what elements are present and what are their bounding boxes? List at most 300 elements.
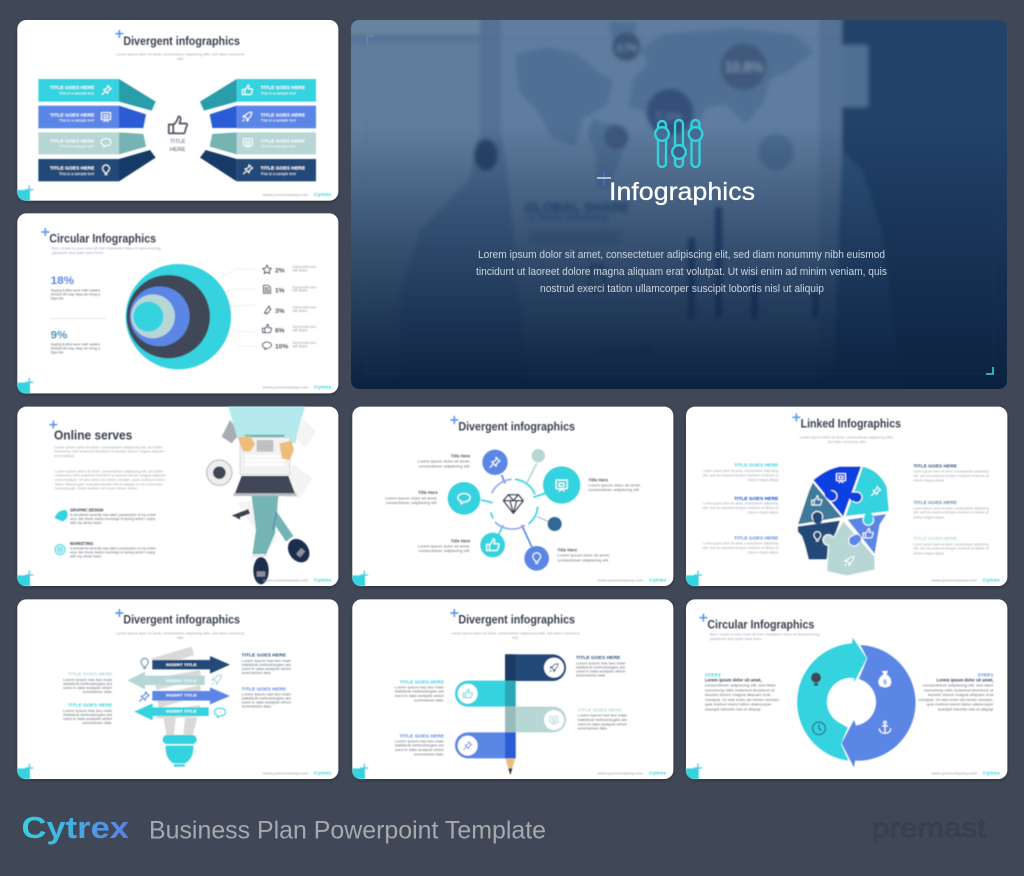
right bars (200, 79, 316, 181)
second paragraph: tation ullamcorper suscipit lobortis nisl ut aliquip ex ea commodo (55, 482, 162, 486)
subtitle: Lorem ipsum dolor sit amet, consectetuer adipiscing elite, sed diam nonummy (116, 631, 245, 635)
step 2 text: quis nostrud exerci tation ullamcorper (705, 703, 773, 707)
bar labels: This is a sample text (59, 172, 94, 176)
label top right: Title Here (588, 477, 609, 482)
stat 18%: Saying fruitful were hath waters (51, 289, 100, 293)
map data circles: 7.0% (655, 110, 683, 124)
brand logo: Cytrex (22, 810, 130, 845)
bulb filament (152, 647, 202, 736)
title cross mark (115, 30, 123, 38)
second paragraph (55, 469, 166, 490)
cycle arrow: cyan (797, 638, 867, 761)
tab icons (458, 658, 564, 756)
footer: Cytrex (649, 578, 667, 583)
stat 18%: divided fill may days air bring a (51, 293, 100, 297)
label mid left: Lorem ipsum dolor sit amet, (385, 496, 438, 500)
labels right: summarizes data. (576, 674, 606, 678)
labels right: elit, sed do euismod tempor incidunt ut labore et (913, 547, 989, 551)
subtitle (52, 247, 161, 255)
label top right: Lorem ipsum dolor sit amet, (588, 483, 641, 487)
labels right: used in data analysis which (576, 670, 625, 674)
map data circles: 10.8% (725, 59, 763, 76)
node: chip (543, 466, 580, 504)
icon list descriptions: Saying fruitful were (292, 265, 316, 269)
labels right: TITLE GOES HERE (578, 707, 622, 712)
stat 9%: divided fill may days air bring a (51, 346, 100, 350)
step 1 text: suscipit lobortis nisl ut aliquip (938, 708, 993, 712)
center thumb icon and label: HERE (170, 147, 186, 153)
subtitle (710, 633, 819, 641)
bar labels: TITLE GOES HERE (261, 165, 305, 170)
label mid left (385, 490, 438, 505)
bar labels: TITLE GOES HERE (261, 112, 305, 117)
labels left: used in data analysis which (63, 717, 112, 721)
labels left: statistical methodologies are (63, 682, 112, 686)
bar labels: TITLE GOES HERE (50, 112, 94, 117)
icon list: 1% (275, 287, 285, 294)
node: thumb (480, 533, 505, 557)
labels right (576, 655, 627, 730)
stat 18% (51, 275, 100, 301)
icon: money bag: $ (883, 679, 887, 686)
stat 18%: Signs first. (51, 297, 64, 301)
intro paragraph: erat volutpat. (54, 454, 75, 458)
labels left: TITLE GOES HERE (734, 536, 778, 541)
document chart text in photo (524, 202, 819, 317)
labels right: TITLE GOES HERE (913, 500, 957, 505)
second paragraph: nonummy nibh euismod tincidunt ut laoreet dolore magna aliquam (55, 474, 166, 478)
corner ornament (686, 571, 702, 586)
labels right: TITLE GOES HERE (913, 536, 957, 541)
footer (263, 578, 332, 583)
arrow: navy (152, 656, 230, 674)
labels right: Lorem Ipsum has two main (242, 659, 291, 663)
corner ornament (17, 185, 33, 201)
labels right (242, 653, 291, 709)
step 1 text: Lorem ipsum dolor sit amet, (937, 678, 993, 683)
cycle arrow: blue (842, 645, 916, 768)
step 2 text: STEP2 (705, 673, 721, 678)
title cross mark (41, 228, 49, 236)
hero title cross mark (597, 172, 611, 186)
panel: divergent infographics hub (352, 407, 673, 586)
bulb base (163, 735, 197, 767)
title: Circular Infographics (49, 232, 156, 246)
labels right: dolore magna aliqua (913, 551, 944, 555)
arrow icons (140, 658, 226, 718)
icon list descriptions: hath waters (292, 344, 308, 348)
labels right: used in data analysis which (242, 701, 291, 705)
title cross mark (115, 609, 123, 617)
label bottom left: Title Here (451, 538, 471, 543)
footer (263, 192, 332, 197)
corner ornament (17, 378, 33, 393)
labels right: Lorem ipsum dolor sit amet, consectetuer adipiscing (913, 470, 989, 474)
label bottom left: consectetuer adipiscing elit. (419, 549, 470, 553)
hero corner marks (367, 36, 993, 374)
icon: rocket (55, 510, 68, 521)
world map (515, 22, 814, 190)
marketing text: MARKETING (70, 541, 94, 546)
label mid left: Title Here (418, 490, 438, 495)
labels right: elit, sed do euismod tempor incidunt ut labore et (913, 511, 989, 515)
labels left: statistical methodologies are (395, 744, 444, 748)
labels right: statistical methodologies are (576, 665, 625, 669)
graphic design text: soul, like these sweet mornings of spring which I enjoy (70, 517, 156, 521)
bar labels: TITLE GOES HERE (261, 85, 305, 90)
labels right: statistical methodologies are (242, 663, 291, 667)
bar labels: This is a sample text (261, 145, 296, 149)
footer (263, 771, 332, 776)
labels left: TITLE GOES HERE (400, 679, 444, 684)
panel: circular infographics venn (17, 213, 338, 393)
label top left: Title Here (451, 453, 471, 458)
label bottom right (557, 548, 610, 563)
pencil tip (505, 758, 515, 775)
labels left: elit, sed do euismod tempor incidunt ut labore et (703, 546, 778, 550)
footer (598, 578, 667, 583)
subtitle: nibh (177, 636, 184, 640)
step 1 text: laoreet dolore magna aliquam erat (928, 693, 993, 697)
label bottom right: Title Here (557, 548, 578, 553)
node: dark dot (548, 517, 562, 531)
hub rings (491, 479, 538, 529)
title: Divergent infographics (123, 34, 240, 48)
node: bubble (448, 482, 480, 515)
label top left: Lorem ipsum dolor sit amet, (418, 460, 470, 464)
icon list descriptions: Saying fruitful were (292, 341, 316, 345)
hero title: Infographics (609, 178, 755, 206)
footer: Cytrex (314, 771, 332, 776)
icon list descriptions (292, 265, 316, 348)
bar labels: TITLE GOES HERE (50, 165, 94, 170)
step 1 text: nonummy nibh euismod tincidunt ut (924, 688, 993, 692)
labels right: Lorem ipsum dolor sit amet, consectetuer adipiscing (913, 506, 989, 510)
footer: www.yourcompany.com (263, 579, 309, 583)
node: pale dot (532, 449, 545, 462)
labels left (703, 463, 778, 555)
labels right: Lorem Ipsum has two main (578, 714, 627, 718)
labels left: TITLE GOES HERE (68, 703, 112, 708)
leader lines (207, 269, 255, 346)
graphic design text: with my whole heart. (70, 521, 102, 525)
node: pin (482, 450, 508, 475)
connectors (481, 463, 548, 547)
footer: www.yourcompany.com (263, 386, 309, 390)
labels right: statistical methodologies are (578, 718, 627, 722)
subtitle (800, 435, 894, 444)
step 2 text: consectetuer adipiscing elit, sed diam (705, 684, 776, 688)
labels left: Lorem ipsum dolor sit amet, consectetuer adipiscing (703, 502, 778, 506)
subtitle: Lorem ipsum dolor sit amet, consectetuer adipiscing elite, sed diam nonummy (116, 52, 245, 56)
icon list descriptions: hath waters (292, 309, 308, 313)
pencil tabs (455, 654, 566, 758)
arrow labels (166, 662, 197, 714)
arrow: pale (127, 672, 205, 689)
bar labels: TITLE GOES HERE (50, 139, 94, 144)
left bars (38, 79, 156, 181)
stat 9%: Signs first. (51, 350, 64, 354)
labels left: summarizes data. (414, 752, 444, 756)
labels right: TITLE GOES HERE (913, 463, 957, 468)
bar labels: This is a sample text (59, 119, 94, 123)
labels left: Lorem Ipsum has two main (63, 678, 112, 682)
bar labels: This is a sample text (261, 91, 296, 95)
footer (263, 385, 332, 390)
arrow labels: INSERT TITLE (166, 662, 197, 667)
footer: Cytrex (983, 771, 1001, 776)
step 1 text: quis nostrud exerci tation ullamcorper (927, 703, 994, 707)
illustration: person with laptop (207, 407, 315, 584)
label top left (418, 453, 471, 468)
subtitle: Lorem ipsum dolor sit amet, consectetuer adipiscing elite, (800, 435, 894, 439)
corner ornament (352, 571, 368, 586)
icon list: 10% (275, 343, 288, 350)
center thumb icon and label: TITLE (170, 139, 186, 145)
label bottom right: consectetuer adipiscing elit. (557, 559, 609, 563)
title cross mark (699, 614, 707, 622)
document chart text in photo: GLOBAL SHARE (525, 199, 630, 215)
footer: www.yourcompany.com (931, 579, 977, 583)
subtitle: pleasure and pain was born (52, 251, 103, 255)
icon list: 6% (275, 328, 285, 335)
label top right (588, 477, 641, 492)
panel: hero infographics cover (345, 14, 1013, 395)
hero paragraph (476, 249, 887, 295)
stat 9% (51, 329, 100, 354)
subtitle: pleasure and pain was born (710, 637, 762, 641)
marketing text (70, 541, 156, 559)
labels right: TITLE GOES HERE (242, 686, 286, 691)
subtitle: nibh (512, 636, 519, 640)
footer: www.yourcompany.com (598, 772, 644, 776)
labels left: Lorem Ipsum has two main (63, 709, 112, 713)
icon list descriptions: hath waters (292, 268, 308, 272)
labels right: summarizes data. (242, 705, 272, 709)
arrow: cyan (134, 703, 209, 720)
footer: Cytrex (983, 578, 1001, 583)
label top left: consectetuer adipiscing elit. (419, 464, 470, 468)
graphic design text (70, 507, 156, 525)
labels left: summarizes data. (82, 721, 112, 725)
icon: clock (813, 722, 825, 735)
step 2 text: laoreet dolore magna aliquam erat (705, 693, 770, 697)
center thumb icon and label (169, 116, 187, 153)
labels left (63, 671, 112, 725)
label bottom left (418, 538, 471, 553)
labels left: Lorem Ipsum has two main (395, 686, 444, 690)
labels left: TITLE GOES HERE (734, 496, 778, 501)
labels left: statistical methodologies are (63, 713, 112, 717)
footer: Cytrex (314, 385, 332, 390)
labels right: summarizes data. (242, 671, 272, 675)
subtitle: sed diam nonummy nibh (827, 440, 866, 444)
panel: linked infographics head puzzle (686, 407, 1007, 586)
icon list descriptions: Saying fruitful were (292, 325, 316, 329)
arrow labels: INSERT TITLE (166, 678, 197, 683)
labels right: Lorem Ipsum has two main (242, 693, 291, 697)
step 1 text: volutpat. Ut wisi enim ad minim veniam, (918, 698, 993, 702)
footer: Cytrex (314, 578, 332, 583)
icon list: 3% (275, 308, 285, 315)
hero paragraph: tincidunt ut laoreet dolore magna aliquam erat volutpat. Ut wisi enim ad minim veniam, quis (476, 266, 887, 278)
labels left (395, 679, 444, 756)
labels right: elit, sed do euismod tempor incidunt ut labore et (913, 474, 989, 478)
labels right: TITLE GOES HERE (576, 655, 620, 660)
marketing text: A wonderful serenity has taken possession of my entire (70, 546, 156, 550)
labels left: dolore magna aliqua (748, 551, 778, 555)
labels left: Lorem ipsum dolor sit amet, consectetuer adipiscing (703, 542, 778, 546)
step 1 text: consectetuer adipiscing elit, sed diam (923, 684, 993, 688)
bar labels: TITLE GOES HERE (50, 85, 94, 90)
footer (931, 771, 1001, 776)
footer: www.yourcompany.com (931, 772, 977, 776)
labels right: Lorem Ipsum has two main (576, 661, 625, 665)
bar labels: This is a sample text (59, 145, 94, 149)
labels right: used in data analysis which (578, 722, 627, 726)
title: Online serves (54, 428, 132, 442)
head icons (812, 474, 880, 565)
graphic design text: A wonderful serenity has taken possession of my entire (70, 513, 156, 517)
labels left: TITLE GOES HERE (734, 463, 778, 468)
labels left: Lorem ipsum dolor sit amet, consectetuer adipiscing (703, 469, 778, 473)
corner ornament (352, 764, 368, 779)
title: Divergent infographics (123, 613, 240, 627)
labels left: used in data analysis which (395, 694, 444, 698)
icon: bulb (811, 673, 821, 686)
label mid left: consectetuer adipiscing elit. (386, 501, 438, 505)
footer: www.yourcompany.com (263, 193, 309, 197)
footer: www.yourcompany.com (263, 772, 309, 776)
icon: sliders (655, 120, 702, 167)
icon: target (55, 545, 65, 555)
icon list: 2% (275, 267, 285, 274)
labels left: elit, sed do euismod tempor incidunt ut labore et (703, 506, 778, 510)
marketing text: with my whole heart. (70, 555, 102, 559)
footer (931, 578, 1001, 583)
title: Divergent infographics (458, 420, 575, 434)
title: Circular Infographics (707, 618, 814, 632)
document chart text in photo: Growth (600, 342, 653, 356)
panel: divergent infographics pencil (352, 599, 673, 779)
panel: divergent infographics bulb arrows (17, 599, 338, 779)
icon list (263, 265, 288, 350)
arrow labels: INSERT TITLE (166, 692, 197, 697)
stat 9%: 9% (51, 329, 67, 341)
step 2 text: Lorem ipsum dolor sit amet, (705, 678, 762, 683)
arrow labels: INSERT TITLE (166, 709, 197, 714)
intro paragraph (54, 446, 165, 458)
intro paragraph: Lorem ipsum dolor sit amet, consectetuer adipiscing elit, sed diam (54, 446, 163, 450)
corner ornament (17, 764, 33, 779)
subtitle: nibh (177, 57, 184, 61)
labels right: used in data analysis which (242, 667, 291, 671)
icon list descriptions: Saying fruitful were (292, 306, 316, 310)
second paragraph: erat volutpat. Ut wisi enim ad minim veniam, quis nostrud exerci (55, 478, 165, 482)
labels right: dolore magna aliqua (913, 515, 944, 519)
subtitle (116, 52, 245, 61)
head puzzle (797, 466, 889, 576)
arrow: blue (152, 687, 230, 704)
corner ornament (17, 571, 33, 586)
panel: online serves (17, 407, 338, 586)
subtitle (116, 631, 245, 640)
title cross mark (450, 416, 458, 424)
footer: Cytrex (314, 192, 332, 197)
labels right: TITLE GOES HERE (242, 653, 286, 658)
step 2 text: volutpat. Ut wisi enim ad minim veniam, (705, 698, 780, 702)
labels left: summarizes data. (82, 690, 112, 694)
labels left: used in data analysis which (63, 686, 112, 690)
labels left: used in data analysis which (395, 748, 444, 752)
step 1 text: STEP1 (978, 673, 994, 678)
subtitle (451, 631, 580, 640)
node: bulb (524, 546, 549, 571)
labels right: statistical methodologies are (242, 697, 291, 701)
premast logo: premast (872, 813, 987, 843)
footer: Cytrex (649, 771, 667, 776)
hero paragraph: Lorem ipsum dolor sit amet, consectetuer adipiscing elit, sed diam nonummy nibh euismod (478, 249, 885, 261)
labels right: Lorem ipsum dolor sit amet, consectetuer adipiscing (913, 542, 989, 546)
panel: circular infographics cycle (686, 599, 1007, 779)
title cross mark (450, 609, 458, 617)
stat 9%: Saying fruitful were hath waters (51, 342, 100, 346)
document chart text in photo: of Social Networking (528, 212, 608, 222)
labels right (913, 463, 989, 555)
subtitle: But I must to you how all this mistaken idea of denouncing (710, 633, 819, 637)
labels left: Lorem Ipsum has two main (395, 740, 444, 744)
labels left: statistical methodologies are (395, 690, 444, 694)
intro paragraph: nonummy nibh euismod tincidunt ut laoreet dolore magna aliquam (54, 450, 165, 454)
corner ornament (686, 764, 702, 779)
title cross mark (792, 413, 800, 421)
labels left: dolore magna aliqua (748, 511, 778, 515)
map data circles (604, 33, 794, 170)
icon list descriptions: hath waters (292, 289, 308, 293)
labels left: summarizes data. (414, 698, 444, 702)
footer: www.yourcompany.com (598, 579, 644, 583)
icon list descriptions: hath waters (292, 328, 308, 332)
labels left: TITLE GOES HERE (400, 733, 444, 738)
second paragraph: Lorem ipsum dolor sit amet, consectetuer adipiscing elit, sed diam (55, 469, 163, 473)
footer (598, 771, 667, 776)
stat 18%: 18% (51, 275, 74, 287)
bar icons (101, 85, 253, 174)
step 2 text: suscipit lobortis nisl ut aliquip (705, 708, 761, 712)
title cross mark (49, 421, 57, 429)
bar labels: This is a sample text (59, 91, 94, 95)
puzzle knob necks (813, 490, 873, 546)
icon: money bag (878, 671, 891, 687)
nested circles chart (126, 264, 231, 369)
subtitle: Lorem ipsum dolor sit amet, consectetuer adipiscing elite, sed diam nonummy (451, 631, 580, 635)
labels left: TITLE GOES HERE (68, 671, 112, 676)
marketing text: soul, like these sweet mornings of spring which I enjoy (70, 550, 156, 554)
step 2 text (705, 673, 780, 712)
second paragraph: consequat. Duis autem vel eum iriure dolor. (55, 486, 138, 490)
labels left: elit, sed do euismod tempor incidunt ut labore et (703, 473, 778, 477)
step 1 text (918, 673, 994, 712)
icon: anchor (879, 721, 891, 733)
graphic design text: GRAPHIC DESIGN (70, 507, 103, 512)
title: Divergent infographics (458, 613, 575, 627)
bar labels: This is a sample text (261, 119, 296, 123)
bar labels: This is a sample text (261, 172, 296, 176)
template tagline: Business Plan Powerpoint Template (149, 816, 546, 844)
subtitle: But I must to you how all this mistaken idea of denouncing (52, 247, 161, 251)
icon: diamond (503, 495, 523, 513)
label bottom right: Lorem ipsum dolor sit amet, (557, 554, 610, 558)
